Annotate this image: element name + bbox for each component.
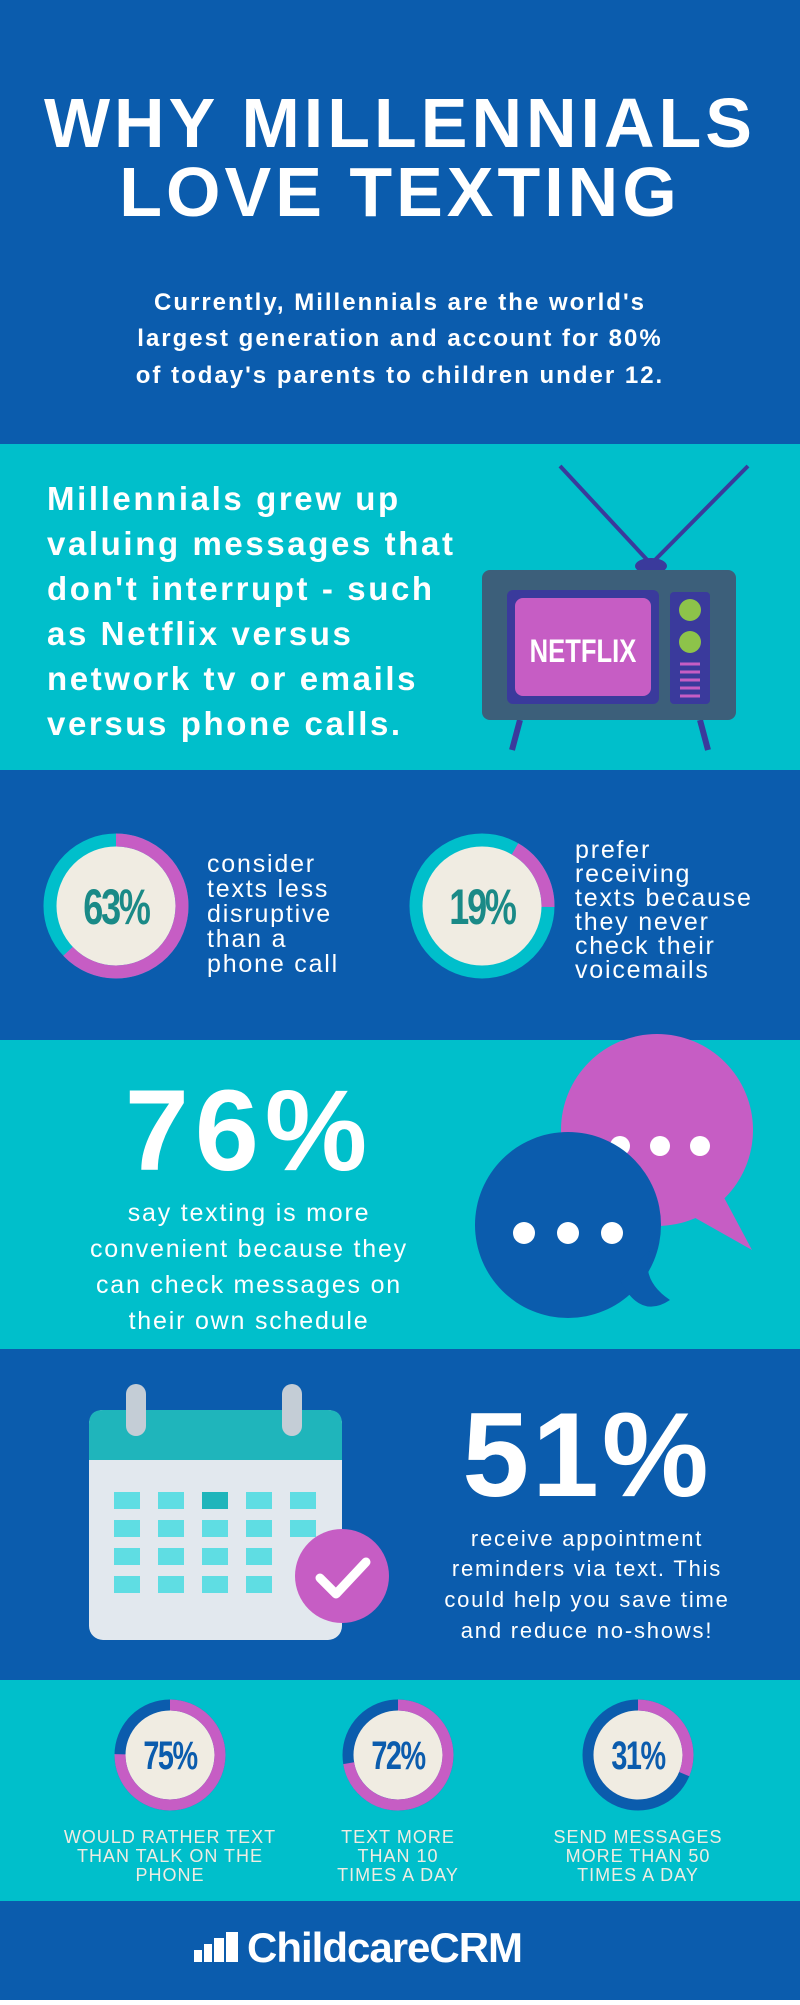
icon: chat bubbles	[475, 1034, 753, 1318]
text: 51% caption	[444, 1526, 730, 1643]
chart: 72% donut: 72%	[371, 1733, 426, 1778]
text: 51% caption: and reduce no-shows!	[461, 1618, 713, 1643]
text: frequency captions: SEND MESSAGES	[553, 1827, 723, 1847]
chart: 63% donut	[50, 840, 182, 972]
chart: 72% donut	[348, 1705, 448, 1805]
icon: calendar	[89, 1384, 389, 1640]
text: frequency captions: THAN TALK ON THE	[77, 1846, 263, 1866]
chart: 63% donut: 63%	[83, 880, 150, 935]
text: 63% caption: than a	[207, 925, 287, 953]
subtitle: of today's parents to children under 12.	[136, 362, 664, 389]
text: 51% caption: could help you save time	[444, 1587, 730, 1612]
title	[44, 84, 756, 231]
text: 51% caption: reminders via text. This	[452, 1556, 722, 1581]
text: 19% caption: prefer	[575, 836, 651, 864]
chart: 31% donut: 31%	[611, 1733, 666, 1778]
text: frequency captions: MORE THAN 50	[566, 1846, 710, 1866]
title: WHY MILLENNIALS	[44, 84, 756, 162]
stat: 76%: 76%	[125, 1067, 373, 1195]
text: 76% caption: can check messages on	[96, 1271, 402, 1299]
panel: footer	[0, 1901, 800, 2000]
panel: 51% appointments	[0, 1349, 800, 1681]
panel: disruption stats	[0, 770, 800, 1040]
text block: messages that don't interrupt: network tv or emails	[47, 660, 418, 697]
text: 63% caption: consider	[207, 850, 316, 878]
text: frequency captions: PHONE	[135, 1865, 205, 1885]
icon: tv: NETFLIX	[530, 634, 637, 670]
panel: 76% convenience	[0, 1034, 800, 1349]
text: frequency captions	[64, 1827, 723, 1885]
text: 76% caption: their own schedule	[129, 1307, 369, 1335]
chart: 75% donut: 75%	[143, 1733, 198, 1778]
text: 19% caption: they never	[575, 908, 710, 936]
text: 63% caption: phone call	[207, 950, 339, 978]
text block: messages that don't interrupt: valuing messages that	[47, 525, 456, 562]
subtitle	[136, 289, 664, 389]
text: 51% caption: receive appointment	[471, 1526, 703, 1551]
icon: tv	[482, 466, 748, 750]
text: 19% caption: voicemails	[575, 956, 710, 984]
panel: header	[0, 0, 800, 444]
text: frequency captions: TIMES A DAY	[337, 1865, 459, 1885]
text: 19% caption: check their	[575, 932, 716, 960]
chart: 19% donut: 19%	[449, 880, 516, 935]
chart: 19% donut	[392, 816, 572, 996]
title: LOVE TEXTING	[119, 153, 681, 231]
subtitle: Currently, Millennials are the world's	[154, 289, 646, 316]
text block: messages that don't interrupt: don't interrupt - such	[47, 570, 435, 607]
text block: messages that don't interrupt	[47, 480, 456, 742]
subtitle: largest generation and account for 80%	[137, 325, 663, 352]
text: frequency captions: TIMES A DAY	[577, 1865, 699, 1885]
text: 63% caption: disruptive	[207, 900, 332, 928]
chart: 75% donut	[120, 1705, 220, 1805]
text block: messages that don't interrupt: versus phone calls.	[47, 705, 403, 742]
text: frequency captions: THAN 10	[357, 1846, 439, 1866]
text: 63% caption	[207, 850, 339, 978]
text: frequency captions: WOULD RATHER TEXT	[64, 1827, 276, 1847]
text: 76% caption	[90, 1199, 408, 1335]
text block: messages that don't interrupt: as Netflix versus	[47, 615, 354, 652]
text block: messages that don't interrupt: Millennials grew up	[47, 480, 401, 517]
logo: ChildcareCRM	[247, 1924, 522, 1971]
text: 19% caption: receiving	[575, 860, 691, 888]
text: 76% caption: say texting is more	[128, 1199, 370, 1227]
stat: 51%: 51%	[462, 1388, 712, 1522]
text: frequency captions: TEXT MORE	[341, 1827, 455, 1847]
text: 76% caption: convenient because they	[90, 1235, 408, 1263]
text: 63% caption: texts less	[207, 875, 329, 903]
panel: texting frequency	[0, 1680, 800, 1901]
text: 19% caption	[575, 836, 753, 984]
panel: netflix	[0, 444, 800, 770]
chart: 31% donut	[588, 1705, 688, 1805]
text: 19% caption: texts because	[575, 884, 753, 912]
